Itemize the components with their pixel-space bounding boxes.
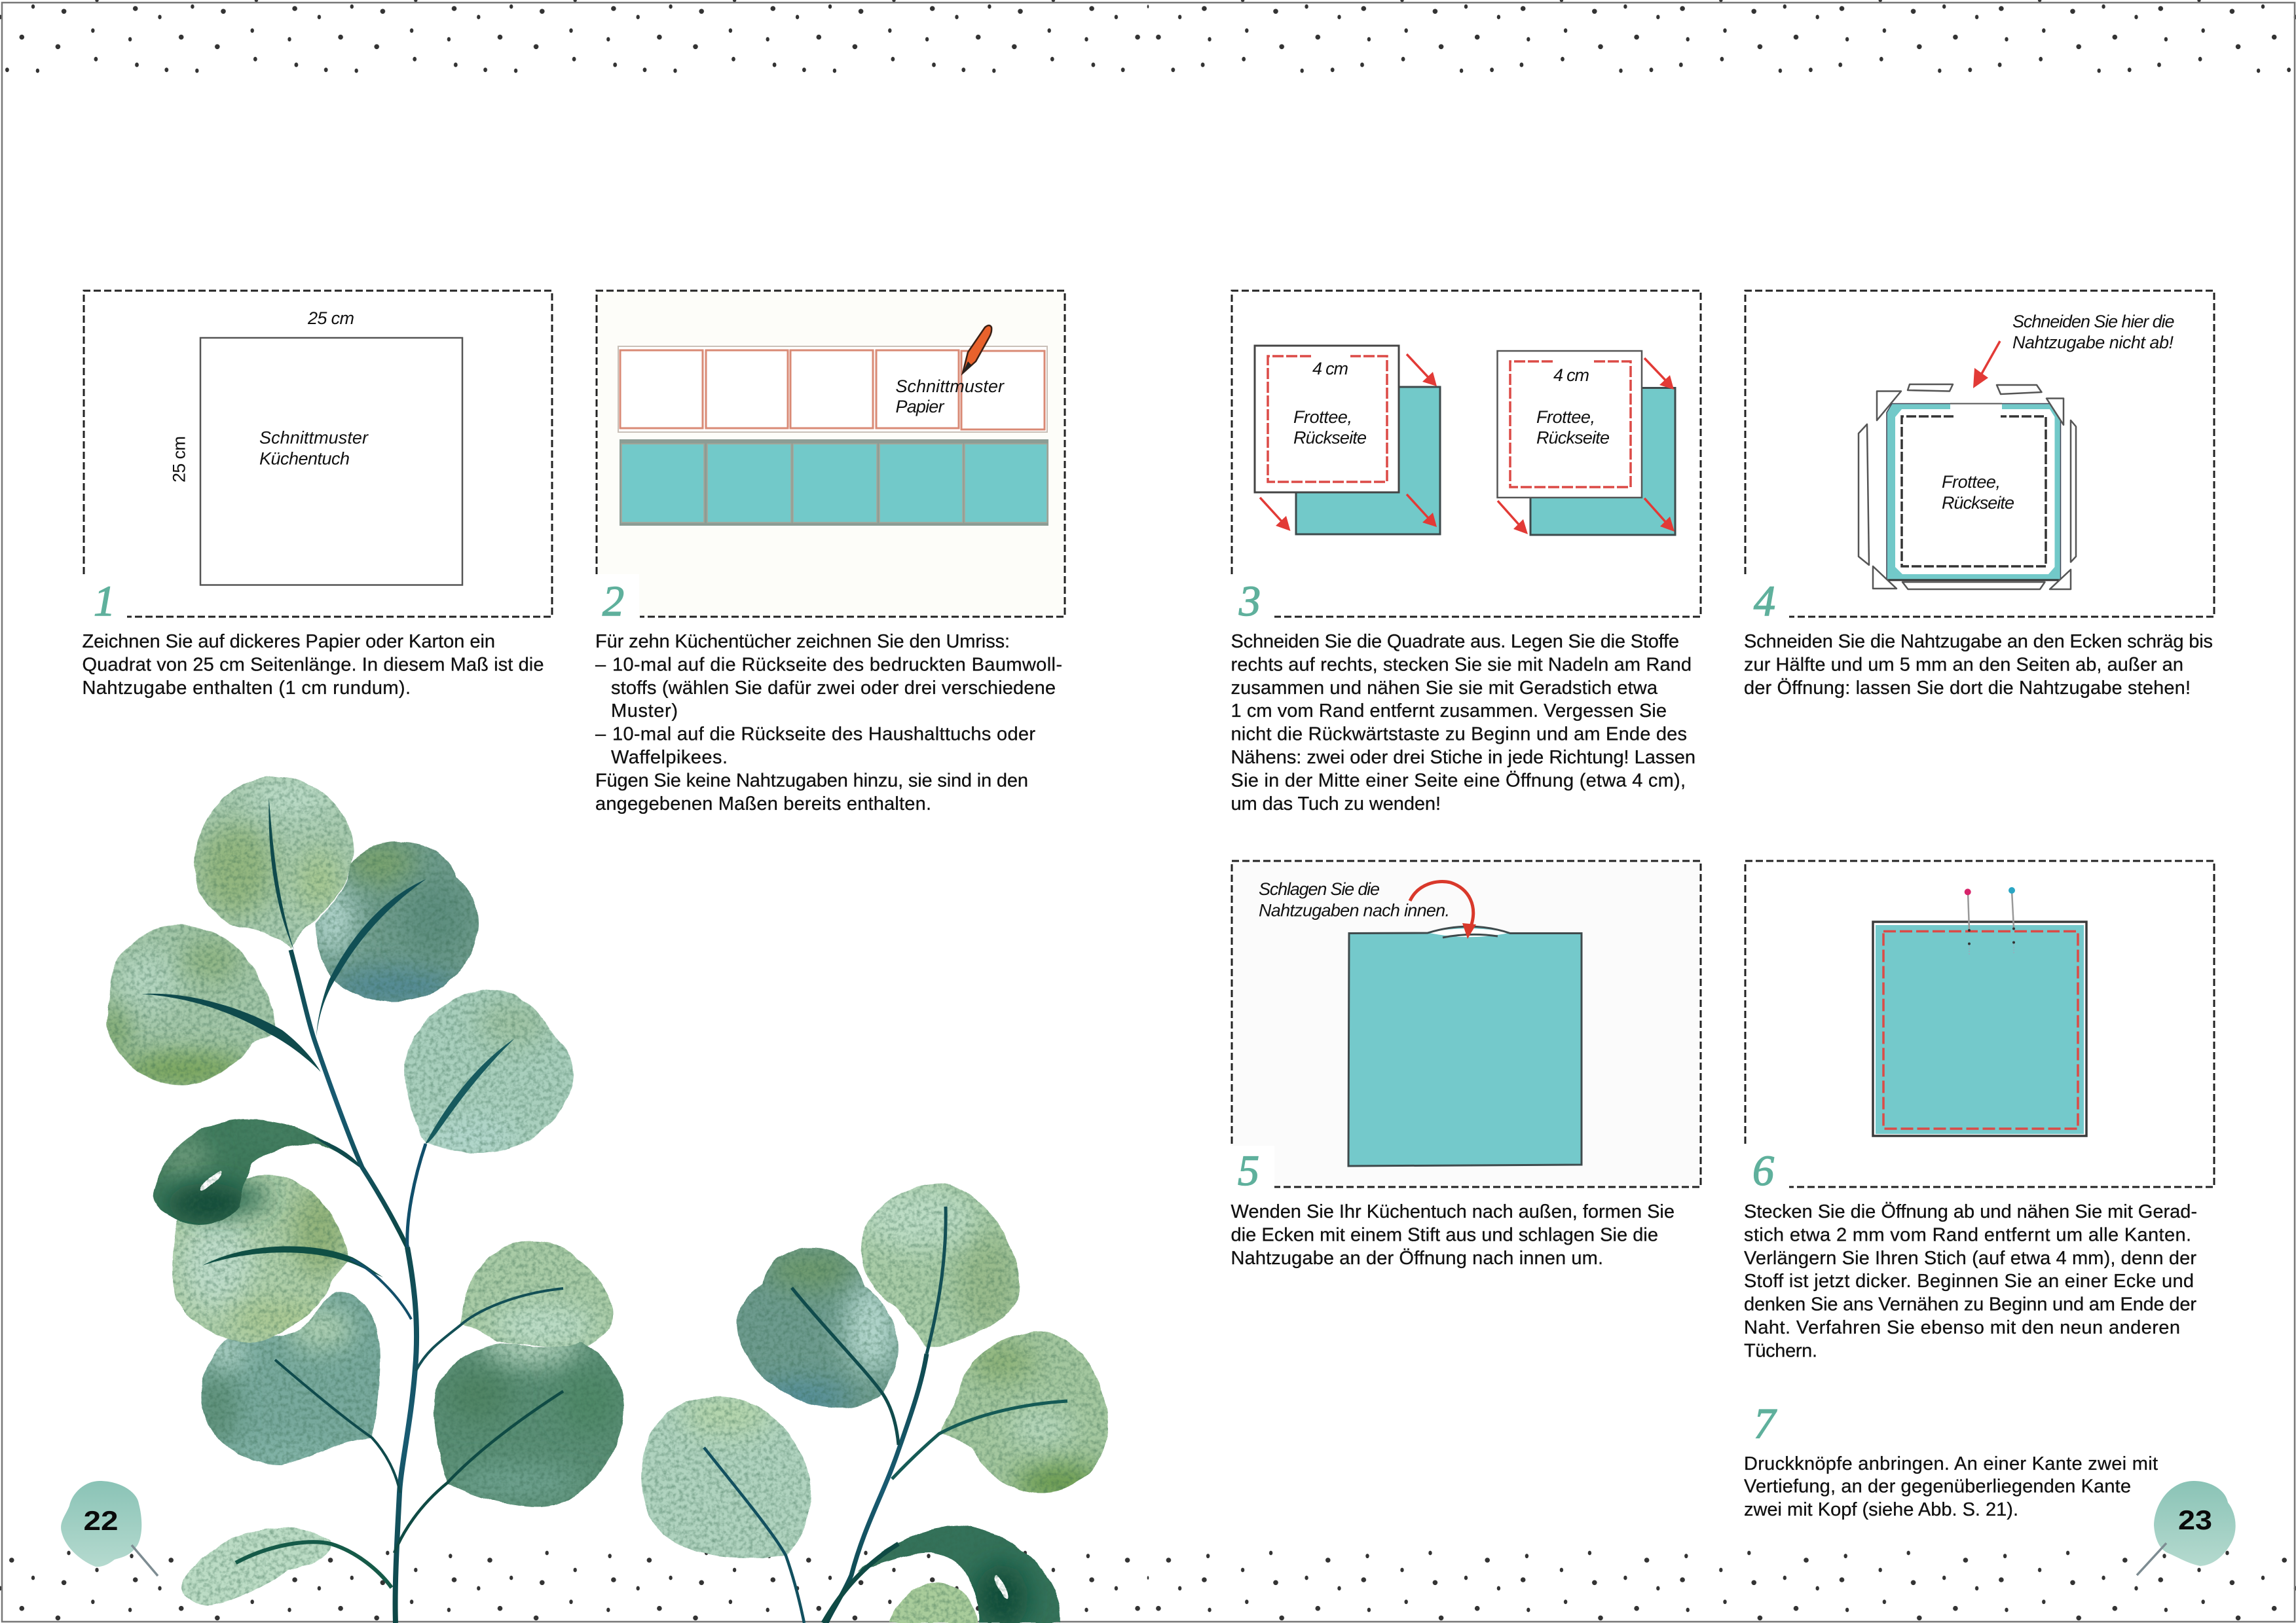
leaf: low pale	[635, 1391, 819, 1565]
step number 4: 4	[1754, 577, 1775, 625]
labels: 4 cm	[1312, 359, 1348, 378]
callout: Nahtzugabe nicht ab!	[2012, 333, 2174, 352]
step 5 text: die Ecken mit einem Stift aus und schlagen Sie die	[1231, 1224, 1658, 1245]
step 1 text: Nahtzugabe enthalten (1 cm rundum).	[83, 678, 411, 699]
labels: Rückseite	[1536, 428, 1610, 448]
number left: 22	[84, 1505, 118, 1536]
labels: Frottee,	[1293, 407, 1352, 427]
leaf: pale under curl	[889, 1582, 978, 1623]
step 6 text: Stecken Sie die Öffnung ab und nähen Sie mit Gerad-	[1744, 1201, 2197, 1222]
illustration: right branch stems	[704, 1207, 1067, 1623]
pattern label: Küchentuch	[259, 449, 350, 469]
leaf: dark blue-green	[316, 841, 479, 1002]
labels: Frottee,	[1536, 407, 1595, 427]
step 2 text: 10-mal auf die Rückseite des bedruckten Baumwoll-	[612, 654, 1062, 675]
icon: pins	[1965, 887, 2015, 955]
step 7 text: zwei mit Kopf (siehe Abb. S. 21).	[1744, 1499, 2018, 1520]
dot band: top left	[0, 0, 1148, 75]
step 4 text: zur Hälfte und um 5 mm an den Seiten ab, außer an	[1744, 654, 2183, 675]
step 3 text: rechts auf rechts, stecken Sie sie mit Nadeln am Rand	[1231, 654, 1692, 675]
step 1 text: Quadrat von 25 cm Seitenlänge. In diesem Maß ist die	[83, 654, 544, 675]
step 2 text: Für zehn Küchentücher zeichnen Sie den Umriss:	[595, 631, 1010, 652]
step 2 text: Fügen Sie keine Nahtzugaben hinzu, sie sind in den	[595, 770, 1028, 791]
step 1 text	[83, 631, 544, 699]
fabric label: Frottee,	[1942, 472, 2001, 492]
step 4 text: der Öffnung: lassen Sie dort die Nahtzugabe stehen!	[1744, 678, 2191, 699]
step 2 text: Muster)	[611, 701, 678, 721]
leaf stem left	[132, 1545, 158, 1576]
step number 6: 6	[1752, 1147, 1774, 1195]
step 3 text: 1 cm vom Rand entfernt zusammen. Vergessen Sie	[1231, 701, 1667, 721]
fabric label: Rückseite	[1942, 493, 2014, 513]
callout	[2012, 312, 2174, 352]
leaf: right pale	[403, 989, 574, 1154]
number backing	[595, 574, 639, 619]
left fabric pair	[1255, 346, 1440, 534]
step number 2: 2	[602, 577, 624, 625]
step number 3: 3	[1238, 577, 1261, 625]
leaf: dark curled	[851, 1519, 1067, 1623]
step 3 text: Schneiden Sie die Quadrate aus. Legen Sie die Stoffe	[1231, 631, 1679, 652]
step 2 text: stoffs (wählen Sie dafür zwei oder drei verschiedene	[611, 678, 1056, 699]
pattern label: Schnittmuster	[259, 428, 369, 448]
step 6 text: Naht. Verfahren Sie ebenso mit den neun anderen	[1744, 1317, 2180, 1338]
step 5 text: Wenden Sie Ihr Küchentuch nach außen, formen Sie	[1231, 1201, 1675, 1222]
dimension side: 25 cm	[170, 436, 189, 483]
icon: leaf badge left	[61, 1481, 141, 1567]
dashed frame 3	[1232, 291, 1701, 617]
step 6 text: Tüchern.	[1744, 1340, 1817, 1361]
step 5 text: Nahtzugabe an der Öffnung nach innen um.	[1231, 1248, 1603, 1269]
step 2 text: Waffelpikees.	[611, 747, 728, 768]
panel: step 4	[1744, 291, 2214, 699]
paper band	[618, 346, 1047, 432]
right fabric pair	[1497, 351, 1675, 535]
leaf: dark curled	[153, 1119, 344, 1225]
arrows	[1260, 354, 1675, 534]
step 2 text: angegebenen Maßen bereits enthalten.	[595, 793, 931, 814]
page number 23	[2137, 1481, 2236, 1575]
step 2 text	[595, 631, 1062, 814]
step 4 text: Schneiden Sie die Nahtzugabe an den Ecken schräg bis	[1744, 631, 2213, 652]
step 2 text: –	[595, 724, 606, 745]
sewn square	[1873, 922, 2086, 1136]
illustration: left eucalyptus branch	[100, 770, 629, 1606]
dashed frame 4	[1745, 291, 2214, 617]
panel: step 5	[1230, 861, 1701, 1269]
leaf: small light	[460, 1241, 614, 1347]
page number 22	[61, 1481, 158, 1576]
highlight	[993, 1574, 1010, 1600]
step 6 text: Stoff ist jetzt dicker. Beginnen Sie an einer Ecke und	[1744, 1271, 2194, 1292]
step 2 text: –	[595, 654, 606, 675]
pattern label	[259, 428, 369, 469]
fabric	[1348, 926, 1582, 1166]
step number 7: 7	[1754, 1400, 1777, 1448]
callout: Nahtzugaben nach innen.	[1259, 901, 1450, 921]
dashed frame 2	[597, 291, 1065, 617]
dashed frame 5	[1232, 861, 1701, 1187]
leaf: large dark green	[426, 1334, 629, 1512]
cut-off pieces	[1859, 384, 2076, 589]
panel: step 1	[83, 291, 552, 699]
step 3 text: nicht die Rückwärtstaste zu Beginn und am Ende des	[1231, 724, 1687, 745]
callout: Schneiden Sie hier die	[2012, 312, 2174, 331]
leaf: top light	[851, 1178, 1028, 1355]
highlight	[199, 1169, 223, 1194]
leaf: lower blue-green	[201, 1292, 380, 1465]
step number 5: 5	[1238, 1147, 1259, 1195]
leaf: left green	[106, 924, 276, 1085]
step 7 text: Druckknöpfe anbringen. An einer Kante zwei mit	[1744, 1453, 2158, 1474]
dashed frame 1	[84, 291, 552, 617]
step 3 text: zusammen und nähen Sie sie mit Geradstich etwa	[1231, 678, 1658, 699]
panel: step 6	[1744, 861, 2214, 1361]
dot bands: right page mirrored	[1148, 0, 2296, 1623]
callout	[1259, 879, 1450, 921]
step 5 text	[1231, 1201, 1675, 1269]
panel background	[1232, 861, 1701, 1187]
icon: pen	[963, 325, 991, 373]
labels: Rückseite	[1293, 428, 1367, 448]
step 6 text	[1744, 1201, 2197, 1361]
leaf: dark blue	[730, 1244, 904, 1414]
step number 1: 1	[94, 577, 115, 625]
labels	[1293, 359, 1610, 448]
step 7 text: Vertiefung, an der gegenüberliegenden Kante	[1744, 1476, 2131, 1497]
step 2 text: 10-mal auf die Rückseite des Haushalttuchs oder	[612, 724, 1035, 745]
step 7 text	[1744, 1453, 2158, 1520]
number right: 23	[2178, 1504, 2212, 1535]
leaf: below curled	[172, 1175, 348, 1343]
curved arrow	[1410, 881, 1476, 939]
dashed frame 6	[1745, 861, 2214, 1187]
pattern label: Schnittmuster	[896, 376, 1005, 396]
leaf: top light	[194, 776, 354, 949]
step 6 text: denken Sie ans Vernähen zu Beginn und am Ende der	[1744, 1294, 2196, 1315]
step 1 text: Zeichnen Sie auf dickeres Papier oder Karton ein	[83, 631, 495, 652]
pattern label: Papier	[896, 397, 944, 416]
leaf: bottom pale	[182, 1527, 331, 1606]
step 6 text: stich etwa 2 mm vom Rand entfernt um alle Kanten.	[1744, 1224, 2191, 1245]
leaf stem right	[2137, 1543, 2166, 1575]
dot band: bottom left	[0, 1545, 1148, 1623]
number backing	[1230, 1146, 1274, 1189]
panel background	[597, 291, 1065, 617]
icon: leaf badge right	[2154, 1481, 2236, 1566]
step 3 text	[1231, 631, 1695, 814]
trimmed fabric	[1887, 403, 2060, 580]
fabric label	[1942, 472, 2014, 513]
illustration: left branch stems	[142, 798, 563, 1623]
panel: step 3	[1231, 291, 1701, 814]
step 3 text: Sie in der Mitte einer Seite eine Öffnung (etwa 4 cm),	[1231, 770, 1686, 791]
step 6 text: Verlängern Sie Ihren Stich (auf etwa 4 mm), denn der	[1744, 1248, 2196, 1269]
step 3 text: Nähens: zwei oder drei Stiche in jede Richtung! Lassen	[1231, 747, 1695, 768]
labels: 4 cm	[1553, 365, 1589, 385]
step 3 text: um das Tuch zu wenden!	[1231, 793, 1441, 814]
panel: step 2	[595, 291, 1065, 814]
arrow	[1973, 341, 2000, 388]
pattern label	[896, 376, 1005, 416]
step 4 text	[1744, 631, 2213, 699]
panel: step 7	[1744, 1400, 2158, 1520]
callout: Schlagen Sie die	[1259, 879, 1380, 899]
illustration: right eucalyptus branch	[635, 1178, 1113, 1623]
fabric band	[620, 439, 1048, 526]
leaf: right green	[936, 1326, 1113, 1503]
pattern square	[200, 338, 462, 585]
dimension top: 25 cm	[307, 308, 354, 328]
